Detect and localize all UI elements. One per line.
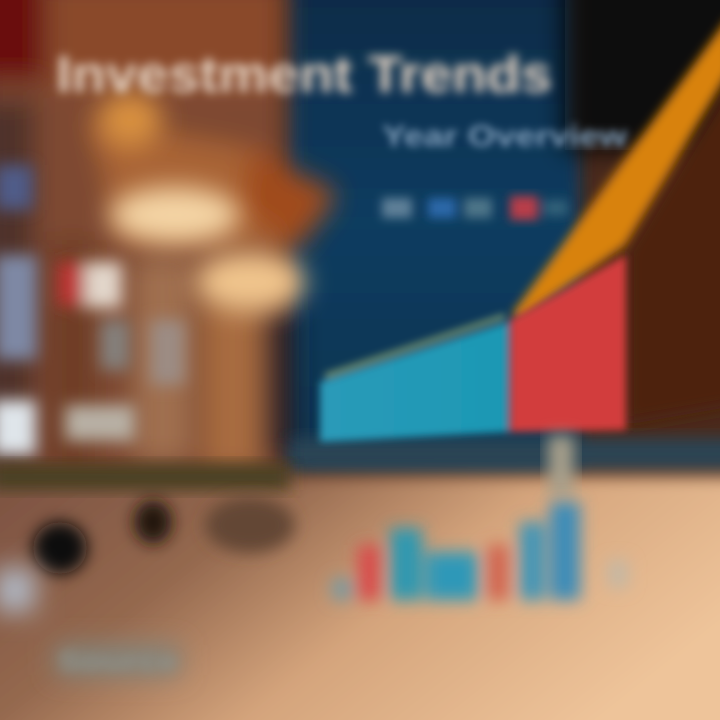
title: Investment Trends bbox=[56, 46, 552, 104]
panel: reception counter strip bbox=[290, 438, 720, 470]
bar chart: large teal and red wall chart bbox=[320, 255, 626, 442]
panel: dark top-right corner bbox=[565, 0, 720, 150]
legend bbox=[382, 196, 568, 220]
panel: navy wall bbox=[285, 0, 580, 470]
panel: floor bbox=[0, 476, 720, 720]
floor reflection patches bbox=[0, 568, 180, 675]
panel: right dark brown wall bbox=[625, 60, 720, 425]
teal rising section bbox=[320, 322, 508, 442]
icon group: dark round stools bbox=[33, 497, 295, 574]
stand: chart support post bbox=[548, 435, 574, 495]
decorative hedge line bbox=[0, 464, 290, 490]
icon group: glowing ceiling lights bbox=[98, 92, 305, 312]
panel: wooden wall bbox=[0, 0, 335, 480]
subtitle: Year Overview bbox=[382, 120, 628, 153]
caption: Source bbox=[58, 646, 178, 676]
bar chart: small reflected floor chart bbox=[332, 502, 628, 600]
icon group: left wall windows bbox=[0, 165, 185, 455]
arrow: orange diagonal trend beam bbox=[512, 15, 720, 320]
red rising section bbox=[510, 255, 626, 432]
trend line bbox=[325, 316, 505, 376]
